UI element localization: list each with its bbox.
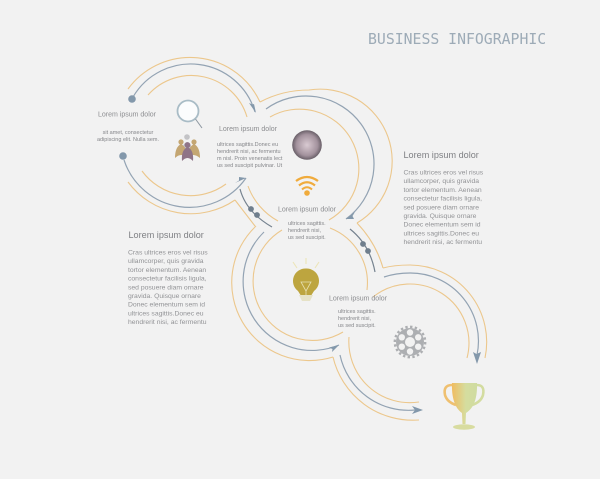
text block: left (128, 230, 208, 326)
text block: step four: us sed suscipit. (338, 323, 376, 329)
text block: left: ultrices sagittis.Donec eu (128, 310, 204, 317)
text block: step one: Lorem ipsum dolor (98, 112, 157, 118)
text block: left: Lorem ipsum dolor (128, 230, 204, 240)
text block: right: Donec elementum sem id (404, 222, 481, 229)
icon: magnifier (178, 100, 202, 128)
circle three arcs (232, 226, 367, 361)
icon: gear (395, 327, 425, 357)
text block: step three (278, 206, 337, 241)
text block: step three: us sed suscipit. (288, 235, 326, 241)
text block: step two: hendrerit nisi, ac fermentu (217, 149, 281, 155)
text block: right: consectetur facilisis ligula, (404, 196, 482, 203)
icon: start dot lower (119, 152, 127, 160)
arrowhead circle two (346, 212, 355, 219)
text block: right (404, 150, 484, 246)
text block: left: gravida. Quisque ornare (128, 293, 201, 300)
text block: step two: Lorem ipsum dolor (219, 126, 278, 133)
text block: left: Cras ultrices eros vel risus (128, 250, 208, 256)
title: BUSINESS INFOGRAPHIC (368, 31, 546, 48)
icon: people (175, 134, 200, 161)
text block: step three: hendrerit nisi, (288, 228, 321, 234)
text block: left: consectetur facilisis ligula, (128, 276, 207, 283)
icon: sphere (292, 130, 322, 160)
text block: right: Lorem ipsum dolor (404, 150, 479, 160)
text block: step four: ultrices sagittis. (338, 309, 376, 315)
circle two arcs (235, 89, 392, 268)
arrowhead (249, 103, 256, 113)
text block: step four: hendrerit nisi, (338, 316, 371, 322)
text block: step two (217, 126, 283, 169)
text block: right: sed posuere diam ornare (404, 204, 479, 211)
text block: right: Cras ultrices eros vel risus (404, 170, 484, 176)
text block: step two: m nisl. Proin venenatis lect (217, 156, 283, 162)
arrowhead down (473, 352, 481, 364)
text block: left: Donec elementum sem id (128, 302, 205, 309)
icon: trophy (445, 383, 483, 430)
text block: right: tortor elementum. Aenean (404, 187, 482, 194)
text block: step one (97, 112, 159, 143)
text block: step four (329, 296, 388, 329)
text block: left: ullamcorper, quis gravida (128, 258, 204, 265)
text block: left: hendrerit nisi, ac fermentu (128, 319, 207, 326)
arrowhead circle three (329, 345, 339, 352)
text block: step three: Lorem ipsum dolor (278, 206, 337, 214)
arrowhead lower (235, 177, 246, 183)
step 1 top arcs (128, 57, 260, 117)
connector with dots right (350, 229, 375, 272)
text block: left: tortor elementum. Aenean (128, 267, 206, 274)
text block: step three: ultrices sagittis. (288, 221, 326, 227)
text block: step four: Lorem ipsum dolor (329, 296, 388, 302)
text block: step two: us sed suscipit pulvinar. Ut (217, 163, 283, 169)
text block: right: hendrerit nisi, ac fermentu (404, 239, 482, 246)
text block: right: ullamcorper, quis gravida (404, 178, 479, 185)
icon: start dot (128, 95, 136, 103)
icon: light bulb (293, 258, 319, 301)
step 2 lower arcs (119, 152, 246, 214)
icon: wifi (296, 177, 318, 196)
text block: step two: ultrices sagittis.Donec eu (217, 142, 278, 148)
circle four arcs (333, 265, 487, 420)
connector with dots left (240, 189, 272, 227)
text block: step one: sit amet, consectetur (103, 130, 154, 136)
text block: right: ultrices sagittis.Donec eu (404, 230, 479, 237)
text block: right: gravida. Quisque ornare (404, 213, 477, 220)
arrowhead right (412, 406, 423, 414)
text block: left: sed posuere diam ornare (128, 284, 204, 291)
text block: step one: adipiscing elit. Nulla sem. (97, 137, 159, 143)
